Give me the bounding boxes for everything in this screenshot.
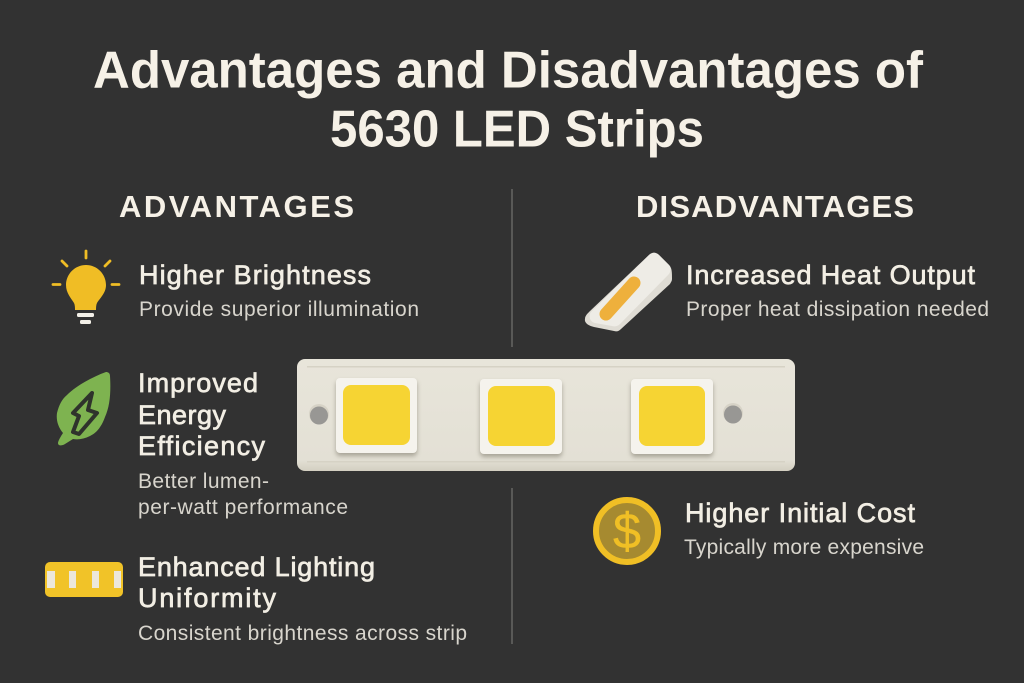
item: improved energy efficiency: Improved bbox=[138, 368, 258, 398]
led chip: right bbox=[631, 379, 713, 457]
item: higher initial cost: Higher Initial Cost bbox=[685, 498, 915, 528]
led chip: middle bbox=[480, 379, 562, 457]
item: improved energy efficiency: Energy bbox=[138, 400, 226, 430]
item: increased heat output: Proper heat dissipation needed bbox=[686, 298, 989, 321]
item: enhanced lighting uniformity: Uniformity bbox=[138, 583, 276, 613]
item: enhanced lighting uniformity: Consistent brightness across strip bbox=[138, 622, 467, 645]
item: improved energy efficiency: Better lumen- bbox=[138, 470, 269, 493]
mounting hole: right bbox=[723, 403, 743, 424]
icon: dollar coin: $ bbox=[613, 503, 641, 559]
icon: led strip bbox=[45, 562, 123, 597]
item: enhanced lighting uniformity: Enhanced Lighting bbox=[138, 552, 375, 582]
item: higher brightness bbox=[139, 260, 419, 321]
mounting hole: left bbox=[309, 404, 329, 424]
heading: disadvantages: DISADVANTAGES bbox=[636, 189, 914, 224]
item: higher brightness: Provide superior illumination bbox=[139, 298, 419, 321]
item: improved energy efficiency bbox=[138, 368, 348, 519]
icon: leaf with lightning bolt bbox=[57, 372, 110, 445]
item: higher initial cost: Typically more expensive bbox=[684, 536, 924, 559]
item: increased heat output bbox=[686, 260, 989, 321]
led chip: left bbox=[336, 378, 417, 456]
item: improved energy efficiency: per-watt performance bbox=[138, 496, 348, 519]
item: enhanced lighting uniformity bbox=[138, 552, 467, 645]
icon: dollar coin bbox=[596, 500, 658, 562]
title: 5630 LED Strips bbox=[330, 100, 704, 158]
item: higher initial cost bbox=[684, 498, 924, 559]
icon: light bulb bbox=[53, 251, 119, 324]
item: increased heat output: Increased Heat Output bbox=[686, 260, 975, 290]
title: Advantages and Disadvantages of bbox=[93, 42, 924, 100]
icon: hot led chip bbox=[585, 253, 672, 331]
item: higher brightness: Higher Brightness bbox=[139, 260, 371, 290]
title bbox=[93, 42, 924, 158]
item: improved energy efficiency: Efficiency bbox=[138, 431, 266, 461]
led strip illustration bbox=[297, 359, 795, 471]
heading: advantages: ADVANTAGES bbox=[119, 189, 354, 224]
